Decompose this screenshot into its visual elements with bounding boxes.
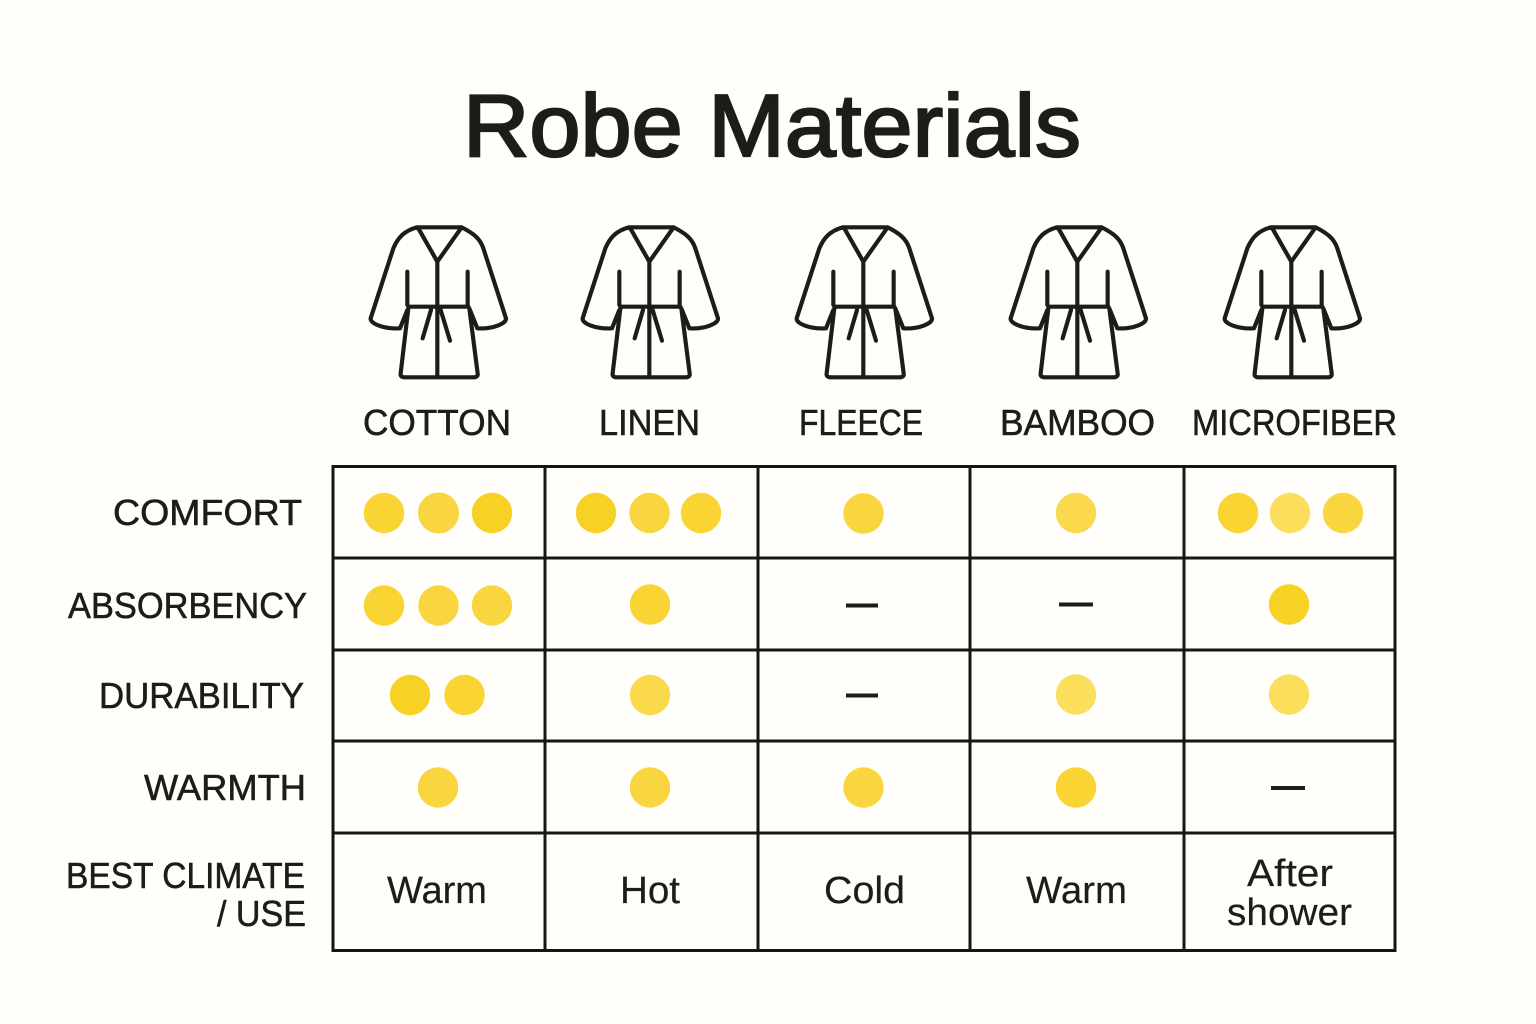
column heading: fleece: FLEECE bbox=[799, 402, 923, 443]
durability dash bbox=[846, 694, 878, 698]
icon: bamboo robe bbox=[1011, 227, 1146, 377]
durability ratings bbox=[390, 674, 1309, 715]
warmth dash bbox=[1271, 786, 1305, 790]
comparison table grid bbox=[333, 466, 1395, 951]
column heading: bamboo: BAMBOO bbox=[1000, 402, 1155, 443]
column heading: cotton: COTTON bbox=[363, 402, 511, 443]
cell: bamboo climate: Warm bbox=[1026, 870, 1127, 912]
cell: linen climate: Hot bbox=[620, 870, 680, 912]
cell: microfiber use: After bbox=[1247, 853, 1333, 895]
comfort ratings bbox=[364, 492, 1363, 534]
column heading: microfiber: MICROFIBER bbox=[1192, 402, 1397, 443]
icon: fleece robe bbox=[797, 227, 932, 377]
row label: best climate / use bbox=[66, 855, 306, 934]
row label: warmth: WARMTH bbox=[144, 767, 306, 808]
icon: cotton robe bbox=[371, 227, 506, 377]
cell: cotton climate: Warm bbox=[387, 870, 487, 912]
column heading: linen: LINEN bbox=[599, 402, 700, 443]
title: Robe Materials bbox=[463, 76, 1081, 175]
cell: microfiber use: shower bbox=[1227, 892, 1352, 934]
cell: microfiber use bbox=[1227, 853, 1352, 934]
row label: absorbency: ABSORBENCY bbox=[68, 585, 307, 626]
icon: microfiber robe bbox=[1225, 227, 1360, 377]
row label: durability: DURABILITY bbox=[99, 675, 304, 716]
absorbency dashes bbox=[846, 604, 1093, 606]
row label: comfort: COMFORT bbox=[113, 492, 302, 533]
warmth ratings bbox=[418, 767, 1096, 808]
cell: fleece climate: Cold bbox=[824, 870, 905, 912]
absorbency ratings bbox=[364, 584, 1309, 626]
icon: linen robe bbox=[583, 227, 718, 377]
row label: best climate / use: / USE bbox=[217, 893, 306, 934]
row label: best climate / use: BEST CLIMATE bbox=[66, 855, 305, 896]
